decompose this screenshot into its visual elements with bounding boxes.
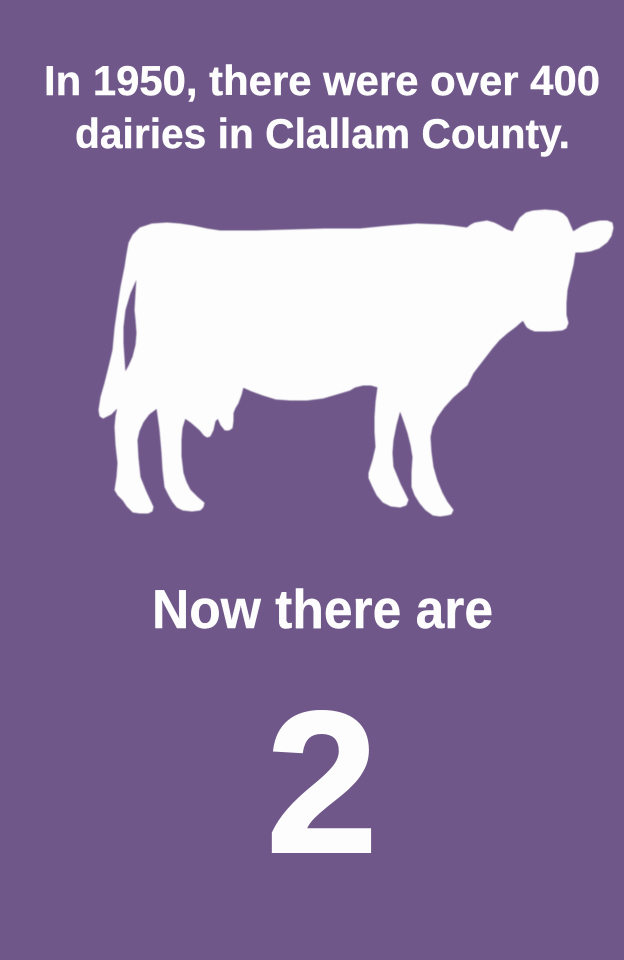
text: now there are: Now there are (152, 578, 493, 640)
heading: dairies in 1950: dairies in Clallam County. (75, 110, 570, 157)
icon: cow silhouette (99, 210, 613, 516)
heading: dairies in 1950 (44, 57, 600, 157)
heading: dairies in 1950: In 1950, there were over 400 (44, 57, 600, 104)
number: 2 dairies: 2 (266, 669, 378, 895)
